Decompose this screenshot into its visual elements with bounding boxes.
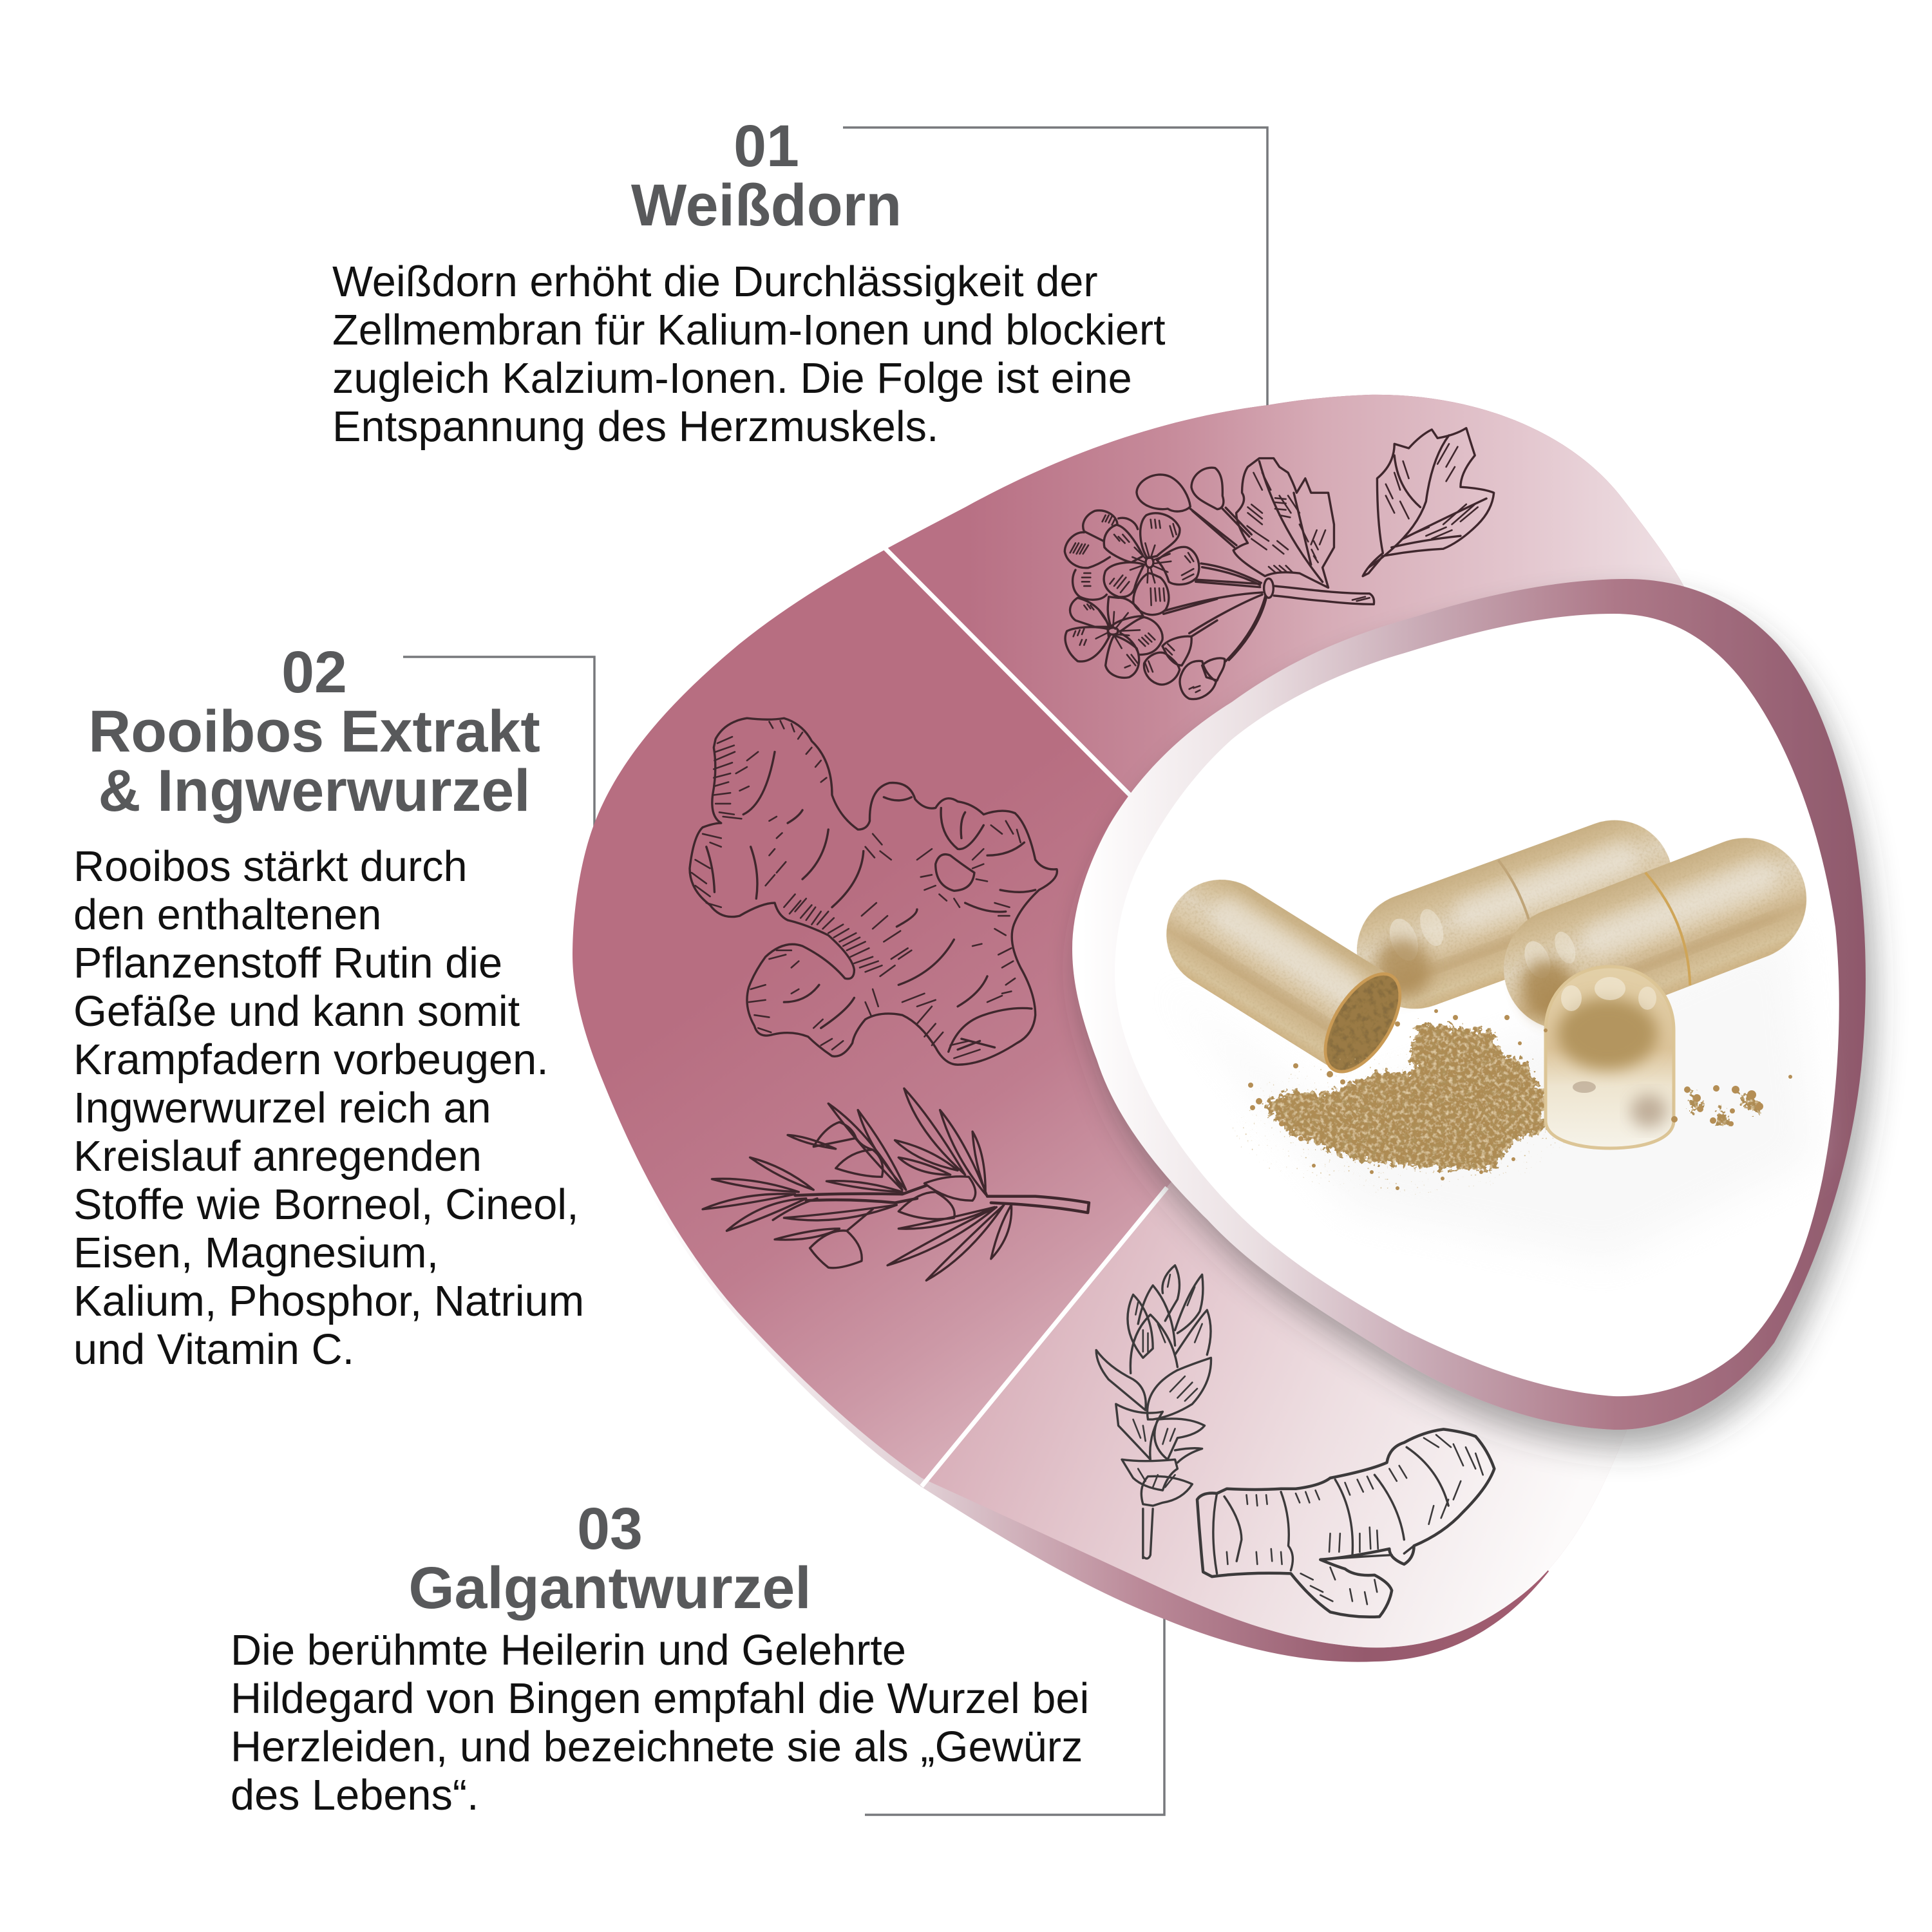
text block: Weißdorn: Zellmembran für Kalium-Ionen und blockiert [332,307,1166,354]
heading: 01 Weißdorn: Weißdorn [631,173,902,238]
capsule front-left, cut open [1145,857,1417,1086]
capsule right [1486,820,1824,1047]
icon: galangal flower [1096,1265,1211,1558]
text block: Rooibos: den enthaltenen [73,891,381,939]
connector line 02 [403,657,594,828]
icon: galangal root [1197,1429,1494,1617]
text block: Rooibos: Krampfadern vorbeugen. [73,1036,549,1084]
panel: white photo area [1115,614,1839,1396]
heading: 02 Rooibos Extrakt & Ingwerwurzel: & Ingwerwurzel [98,758,531,824]
icon: ginger root [690,718,1057,1065]
powder pile [1264,1024,1546,1170]
text block: Galgantwurzel: Die berühmte Heilerin und Gelehrte [231,1627,906,1674]
capsule standing, half empty [1546,967,1674,1148]
text block: Rooibos: Ingwerwurzel reich an [73,1084,491,1132]
icon: hawthorn branch with flowers [1065,428,1494,699]
text block: Rooibos: Stoffe wie Borneol, Cineol, [73,1181,579,1229]
text block: Rooibos: Rooibos stärkt durch [73,843,468,891]
divider bottom [922,1188,1167,1486]
text block: Galgantwurzel: Hildegard von Bingen empfahl die Wurzel bei [231,1675,1089,1723]
powder dust [1230,1053,1578,1195]
divider top [885,548,1135,800]
powder specks right [1690,1088,1761,1124]
connector line 01 [843,128,1267,412]
text block: Galgantwurzel: Herzleiden, und bezeichnete sie als „Gewürz [231,1723,1083,1771]
segment: Galgantwurzel [966,1182,1627,1647]
text block: Rooibos: Pflanzenstoff Rutin die [73,940,502,987]
text block: Rooibos: Eisen, Magnesium, [73,1229,439,1277]
connector line 03 [865,1610,1164,1815]
capsule back [1341,804,1689,1025]
text block: Rooibos: Kalium, Phosphor, Natrium [73,1278,584,1325]
panel: capsule frame [1072,579,1866,1430]
heading: 01 Weißdorn: 01 [734,113,799,179]
loose powder grains [1248,1009,1792,1190]
text block: Galgantwurzel: des Lebens“. [231,1772,479,1819]
text block: Weißdorn: Weißdorn erhöht die Durchlässigkeit der [332,258,1098,306]
segment: Rooibos and ginger [573,395,1739,1647]
shape rim [596,1079,1549,1662]
text block: Rooibos: und Vitamin C. [73,1326,354,1374]
segment: Weißdorn [888,394,1684,793]
text block: Rooibos: Kreislauf anregenden [73,1133,482,1180]
text block: Weißdorn: Entspannung des Herzmuskels. [332,403,939,451]
text block: Rooibos: Gefäße und kann somit [73,988,520,1036]
heading: 03 Galgantwurzel: 03 [577,1496,643,1562]
panel: petal shape with three segments [573,395,1739,1662]
heading: 03 Galgantwurzel: Galgantwurzel [408,1555,811,1621]
heading: 02 Rooibos Extrakt & Ingwerwurzel: Rooibos Extrakt [88,699,540,764]
image: capsules with powder [1166,820,1833,1195]
text block: Weißdorn: zugleich Kalzium-Ionen. Die Folge ist eine [332,355,1132,402]
heading: 02 Rooibos Extrakt & Ingwerwurzel: 02 [281,639,347,705]
soft ground shading [1159,921,1816,1262]
icon: rooibos sprig [703,1088,1089,1280]
